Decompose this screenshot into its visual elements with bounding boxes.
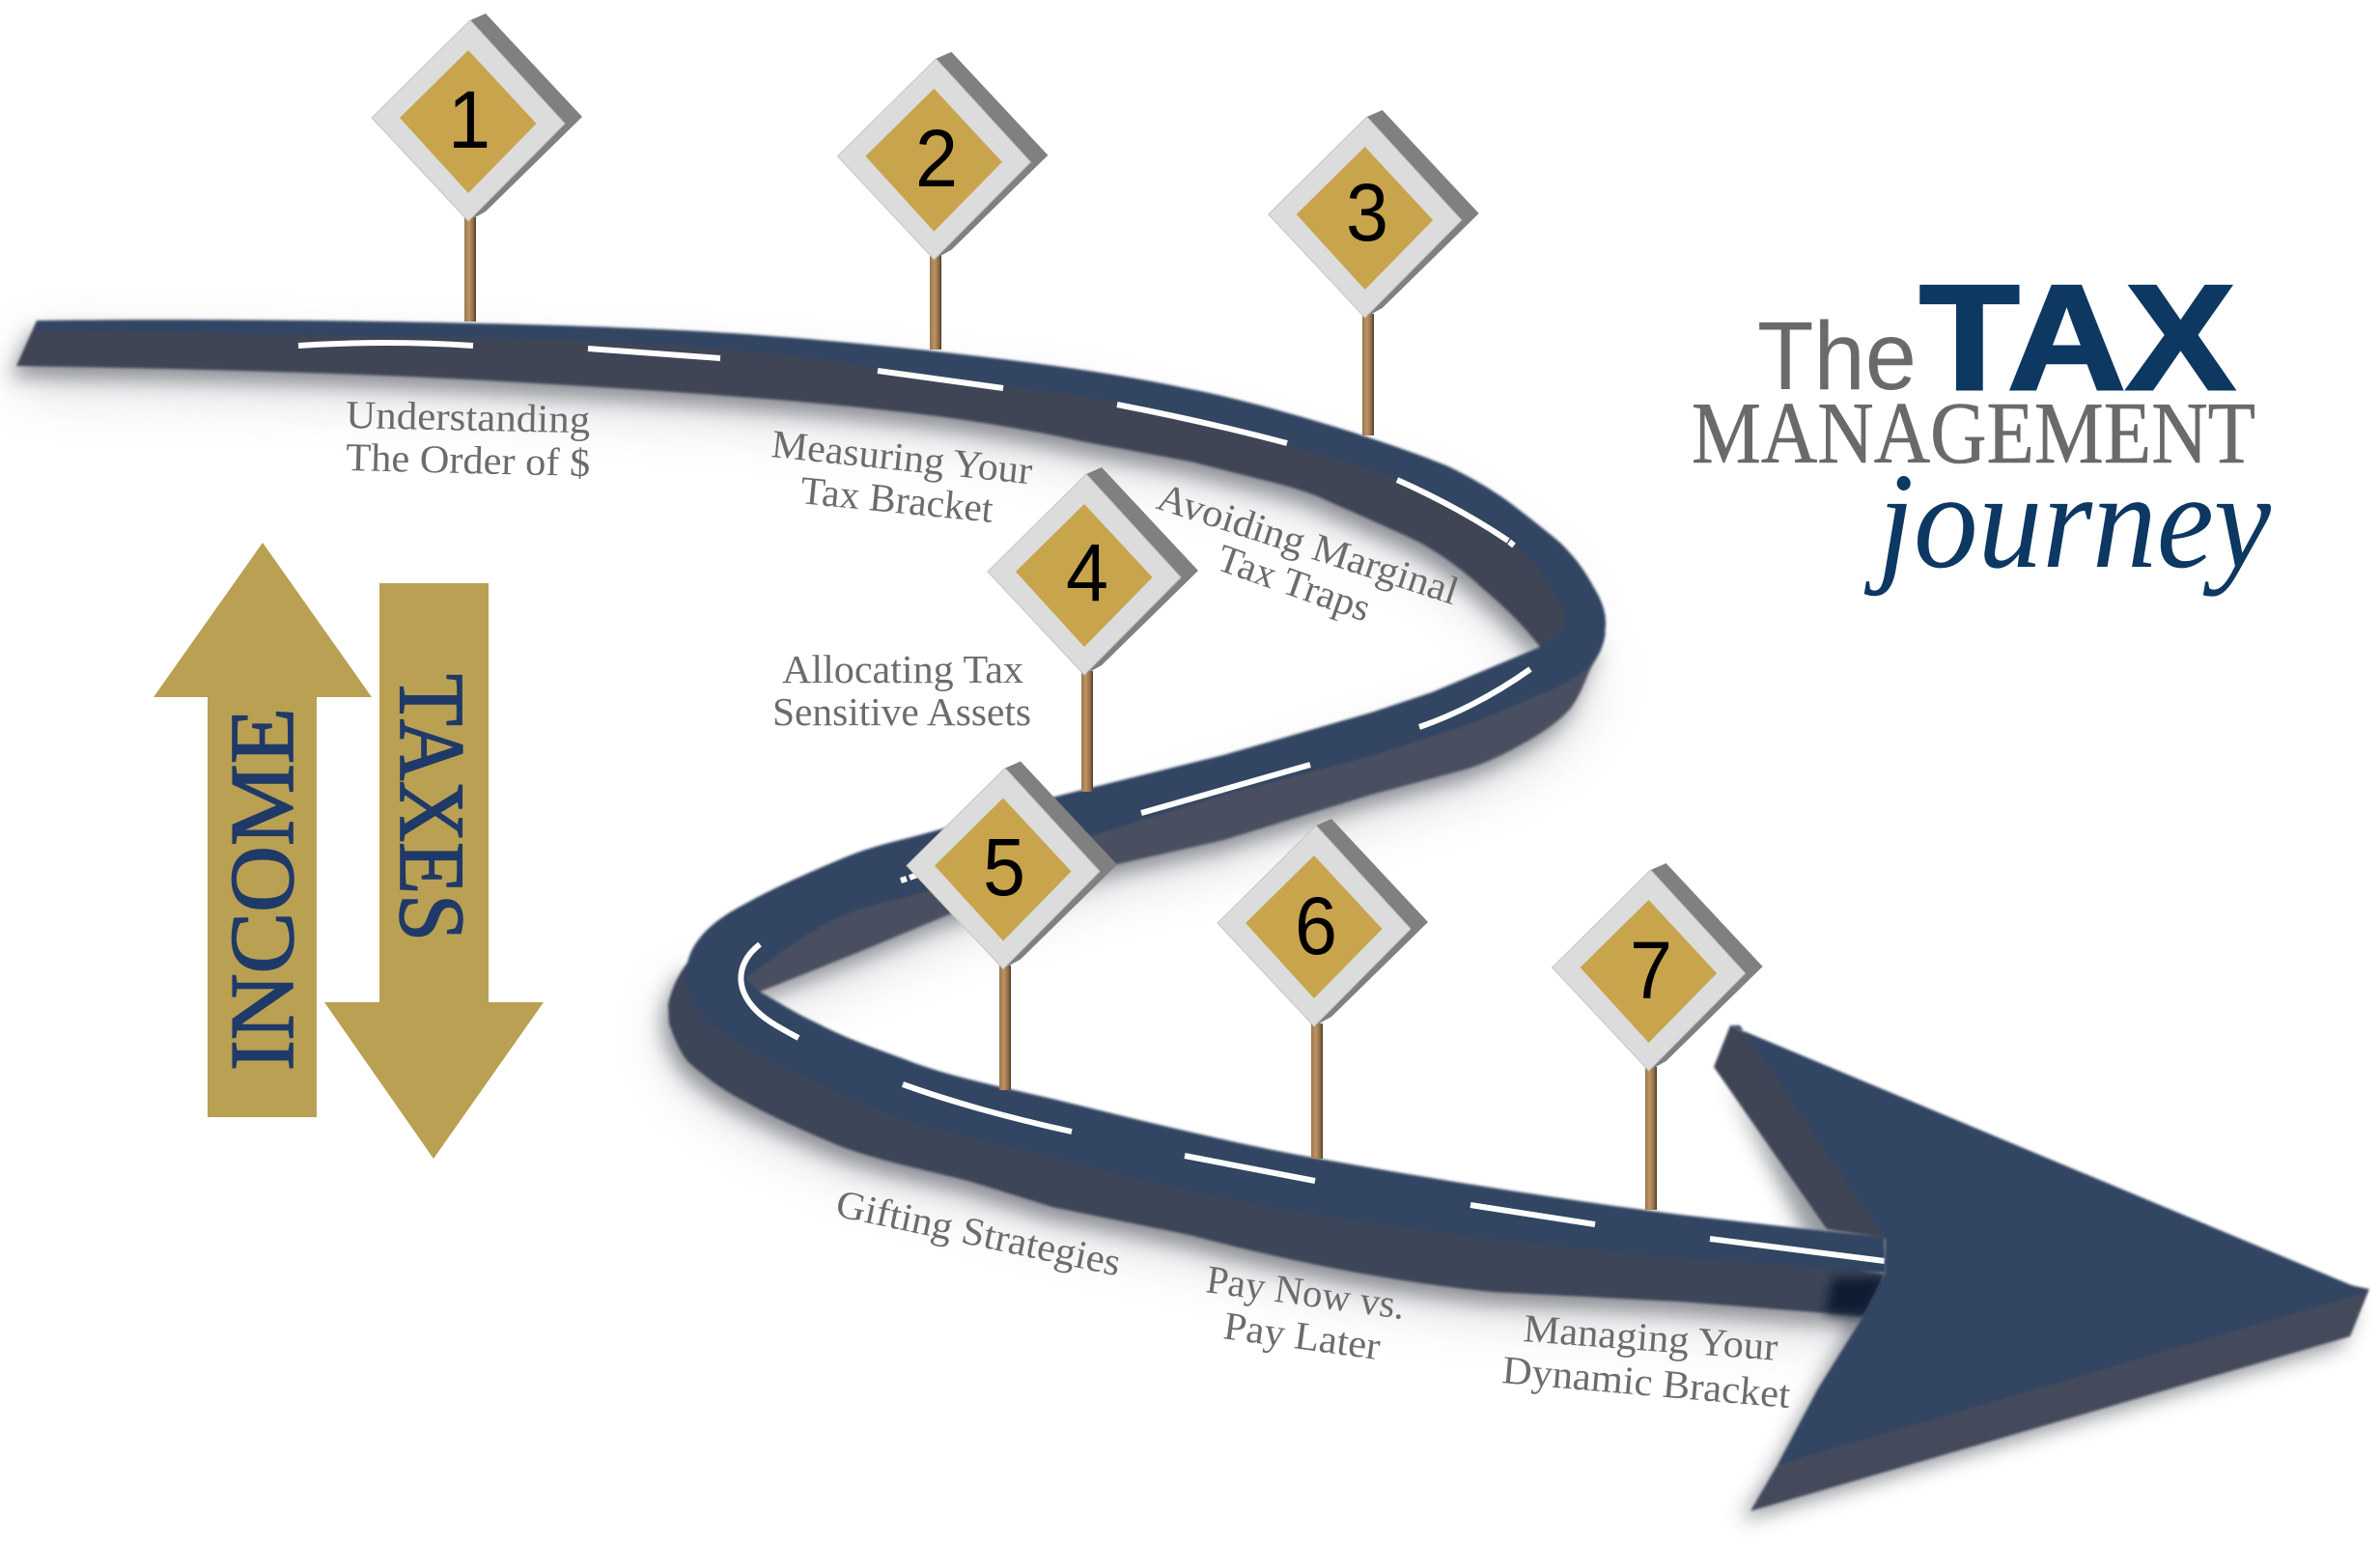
arrowhead at end of road xyxy=(1714,1025,2369,1511)
arrowhead barb side wall xyxy=(1714,1025,1902,1239)
caption: Pay Now vs. Pay Later: Pay Now vs. xyxy=(1204,1256,1408,1328)
caption: Understanding The Order of $ xyxy=(346,392,591,485)
sign 6 xyxy=(1218,819,1428,1159)
caption: Allocating Tax Sensitive Assets xyxy=(772,647,1031,734)
caption: Allocating Tax Sensitive Assets: Allocating Tax xyxy=(782,647,1023,691)
caption: Measuring Your Tax Bracket: Tax Bracket xyxy=(798,467,995,531)
sign 5 xyxy=(907,761,1117,1090)
caption: Measuring Your Tax Bracket xyxy=(770,421,1035,531)
caption: Gifting Strategies: Gifting Strategies xyxy=(832,1181,1125,1284)
title word: The: The xyxy=(1757,302,1917,410)
sign 2: 2 xyxy=(915,113,958,204)
sign 6: 6 xyxy=(1295,881,1337,971)
caption: Understanding The Order of $: Understanding xyxy=(346,392,591,441)
sign 1: 1 xyxy=(448,74,490,165)
income label: INCOME xyxy=(212,708,313,1071)
title word: MANAGEMENT: MANAGEMENT xyxy=(1692,384,2255,482)
title word: journey: journey xyxy=(1863,444,2272,597)
title xyxy=(1692,254,2272,597)
caption: Managing Your Dynamic Bracket: Managing Your xyxy=(1522,1305,1779,1369)
caption: Understanding The Order of $: The Order of $ xyxy=(346,435,591,485)
sign 4: 4 xyxy=(1066,527,1108,618)
caption: Avoiding Marginal Tax Traps: Tax Traps xyxy=(1212,535,1377,631)
dark junction patch xyxy=(1825,1276,1888,1316)
caption: Avoiding Marginal Tax Traps: Avoiding Marginal xyxy=(1152,474,1465,613)
caption: Allocating Tax Sensitive Assets: Sensitive Assets xyxy=(772,689,1031,734)
sign 4 xyxy=(988,467,1198,792)
road top surface xyxy=(37,320,1886,1273)
taxes label: TAXES xyxy=(380,674,484,941)
arrowhead lower side wall xyxy=(1750,1284,2369,1511)
sign 5: 5 xyxy=(983,822,1025,912)
sign 3 xyxy=(1269,110,1479,435)
road side wall: first stretch xyxy=(16,321,1583,647)
sign 3: 3 xyxy=(1346,167,1388,258)
sign 2 xyxy=(837,52,1048,350)
winding road xyxy=(16,320,1886,1316)
sign 7: 7 xyxy=(1630,925,1672,1016)
lane markings xyxy=(298,343,1885,1261)
caption: Managing Your Dynamic Bracket: Dynamic Bracket xyxy=(1500,1347,1793,1416)
road shadow xyxy=(11,332,2358,1521)
income up arrow xyxy=(154,543,372,1117)
title word: TAX: TAX xyxy=(1919,254,2235,421)
taxes down arrow xyxy=(324,583,544,1159)
caption: Pay Now vs. Pay Later: Pay Later xyxy=(1221,1303,1384,1368)
caption: Measuring Your Tax Bracket: Measuring Your xyxy=(770,421,1035,492)
caption: Managing Your Dynamic Bracket xyxy=(1500,1305,1793,1416)
arrowhead top surface xyxy=(1730,1025,2367,1465)
sign 1 xyxy=(372,14,582,322)
road side wall: second stretch xyxy=(746,632,1606,992)
sign 7 xyxy=(1553,863,1763,1210)
caption: Pay Now vs. Pay Later xyxy=(1204,1256,1408,1368)
road side wall: third stretch xyxy=(668,963,1885,1316)
